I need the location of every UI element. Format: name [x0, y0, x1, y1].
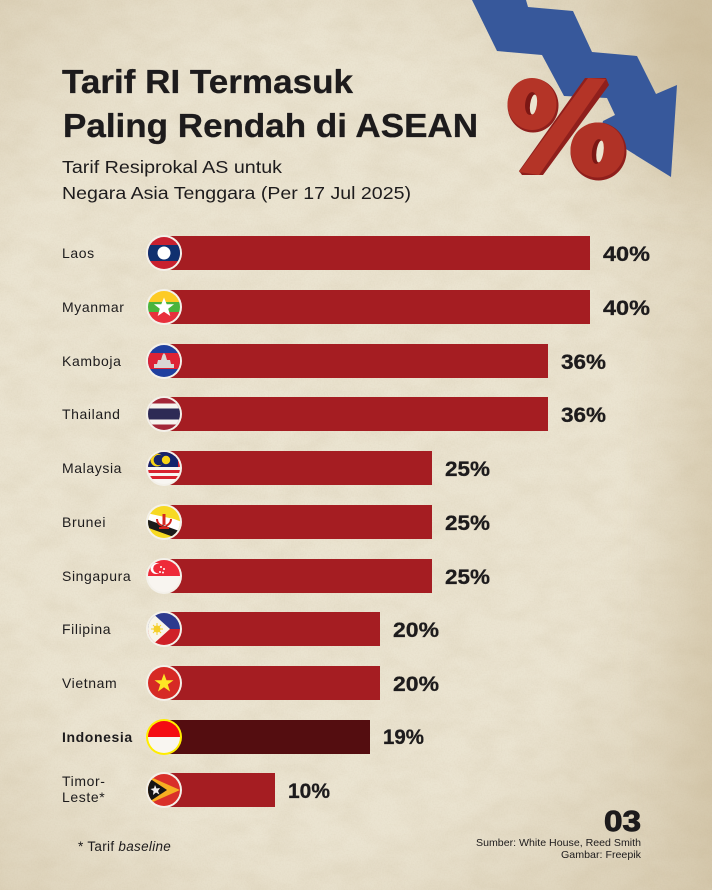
value labels: 25% [445, 566, 490, 589]
bar: Myanmar 40% [164, 290, 590, 324]
footnote: * Tarif baseline [78, 839, 171, 854]
subtitle: Negara Asia Tenggara (Per 17 Jul 2025) [62, 183, 411, 203]
country labels: Thailand [62, 406, 121, 422]
flag: Thailand [146, 396, 182, 432]
country labels: Timor- [62, 773, 106, 789]
flag: Myanmar [146, 289, 182, 325]
title: Paling Rendah di ASEAN [63, 107, 478, 144]
bar: Filipina 20% [164, 612, 380, 646]
country labels [62, 245, 133, 805]
bar: Laos 40% [164, 236, 590, 270]
flag: Indonesia [146, 719, 182, 755]
flag: Vietnam [146, 665, 182, 701]
bar: Malaysia 25% [164, 451, 432, 485]
bars [164, 236, 590, 807]
value labels: 40% [603, 243, 650, 266]
arrow: falling blue [472, 0, 677, 177]
country labels: Filipina [62, 621, 111, 637]
value labels: 40% [603, 297, 650, 320]
icon: percent sign [508, 78, 626, 180]
bar: Indonesia 19% [164, 720, 370, 754]
value labels: 25% [445, 458, 490, 481]
value labels: 36% [561, 404, 606, 427]
country labels: Vietnam [62, 675, 117, 691]
bar: Timor-Leste 10% [164, 773, 275, 807]
country labels: Kamboja [62, 353, 121, 369]
value labels: 10% [288, 780, 330, 803]
flag: Timor-Leste [146, 772, 182, 808]
value labels: 36% [561, 351, 606, 374]
country labels: Singapura [62, 568, 131, 584]
bar: Kamboja 36% [164, 344, 548, 378]
bar: Singapura 25% [164, 559, 432, 593]
flag: Cambodia [146, 343, 182, 379]
flag: Brunei [146, 504, 182, 540]
source credits: Sumber: White House, Reed Smith [476, 837, 641, 849]
source credits: Gambar: Freepik [561, 849, 642, 861]
subtitle [62, 157, 411, 203]
flag: Singapore [146, 558, 182, 594]
page number: 03 [604, 806, 641, 838]
country labels: Leste* [62, 789, 105, 805]
value labels: 19% [383, 726, 424, 749]
subtitle: Tarif Resiprokal AS untuk [62, 157, 282, 177]
bar: Vietnam 20% [164, 666, 380, 700]
title: Tarif RI Termasuk [62, 63, 354, 100]
source credits [476, 837, 642, 861]
flag: Malaysia [146, 450, 182, 486]
bar: Brunei 25% [164, 505, 432, 539]
country labels: Indonesia [62, 729, 133, 745]
value labels: 25% [445, 512, 490, 535]
country labels: Myanmar [62, 299, 125, 315]
flag: Laos [146, 235, 182, 271]
bar: Thailand 36% [164, 397, 548, 431]
flag: Philippines [146, 611, 182, 647]
country labels: Brunei [62, 514, 106, 530]
country labels: Malaysia [62, 460, 122, 476]
country labels: Laos [62, 245, 95, 261]
value labels: 20% [393, 619, 439, 642]
value labels: 20% [393, 673, 439, 696]
value labels [288, 243, 650, 803]
title [62, 63, 478, 144]
